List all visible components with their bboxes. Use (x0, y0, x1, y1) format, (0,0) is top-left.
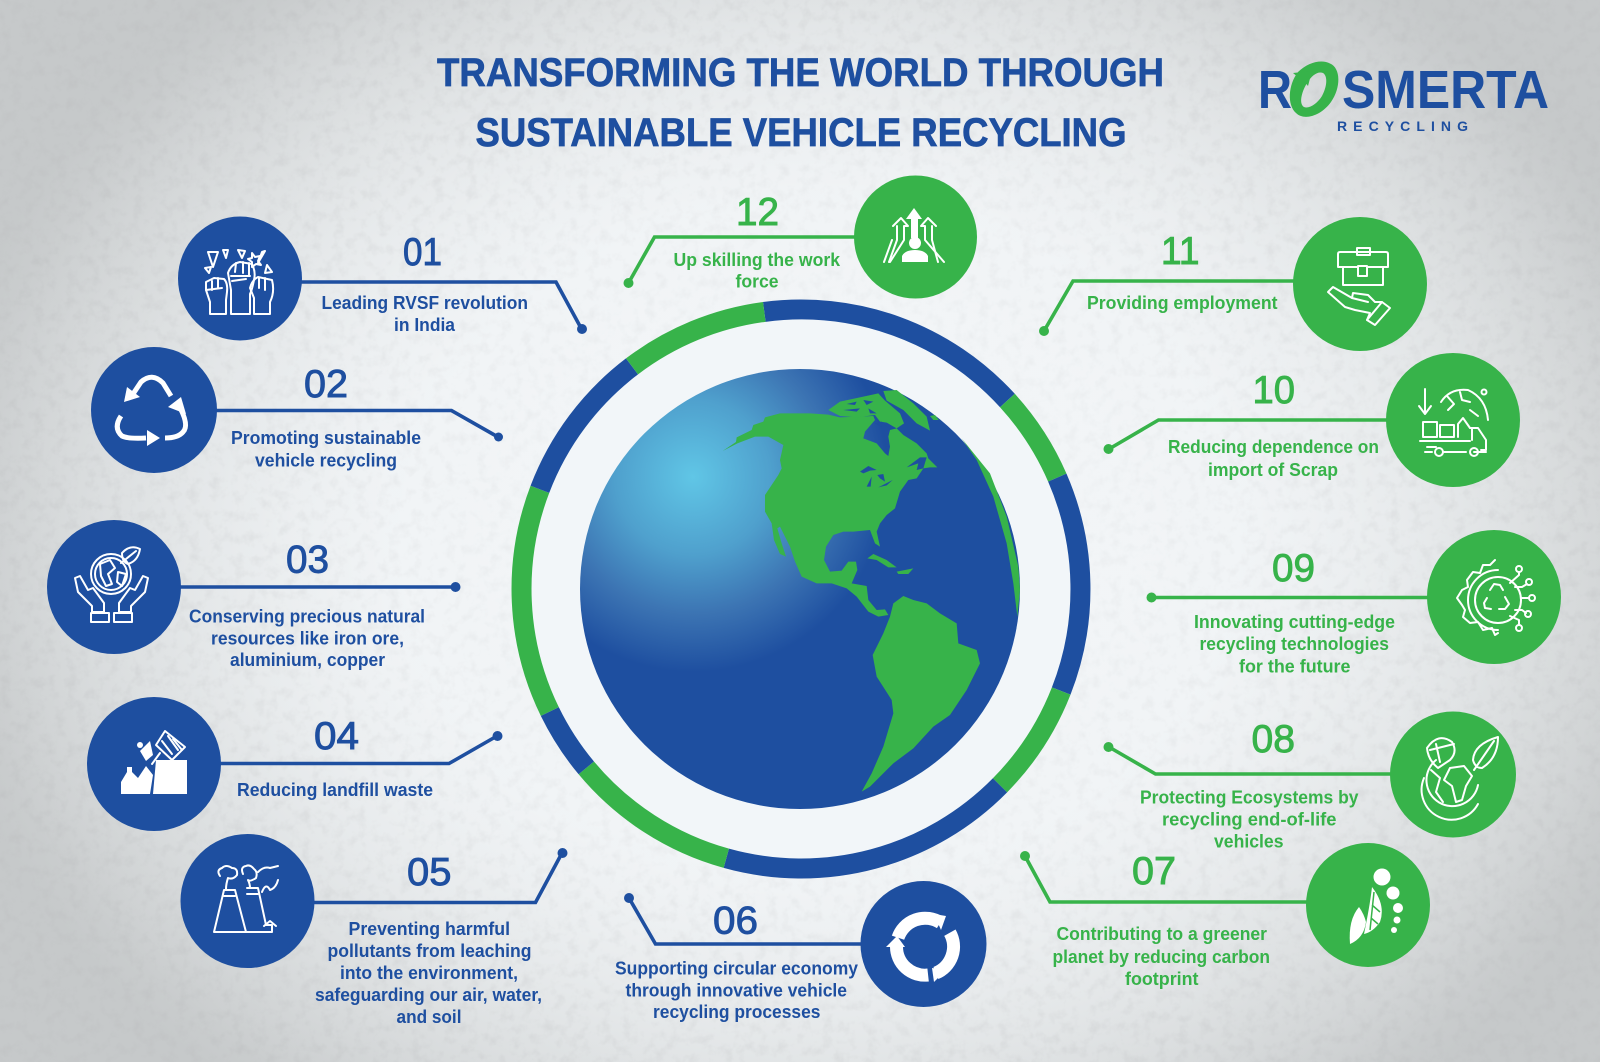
halo inside ring (513, 301, 1089, 877)
icon circle: leaf footprint (1306, 843, 1430, 967)
description 05: Preventing harmful (348, 919, 510, 939)
number 03: 03 (286, 538, 329, 582)
description 03 (189, 606, 425, 670)
connector 10 (1104, 420, 1390, 454)
icon circle: circular economy arrows (860, 881, 986, 1007)
description 02 (231, 428, 421, 470)
connector 02 (215, 410, 503, 442)
logo: Rosmerta Recycling: SMERTA (1342, 60, 1549, 120)
title (437, 51, 1164, 155)
number 07: 07 (1132, 850, 1176, 893)
item 09 (1146, 530, 1561, 676)
icon circle: import truck and globe (1386, 353, 1520, 487)
description 01 (322, 293, 528, 335)
item 05 (180, 834, 568, 1027)
connector 07 (1020, 851, 1310, 902)
number 02: 02 (304, 363, 348, 406)
globe ocean (580, 369, 1020, 809)
icon circle: upskilling arrows and person (854, 176, 977, 298)
description 08: vehicles (1214, 832, 1284, 852)
description 06: recycling processes (653, 1002, 820, 1022)
item 02 (91, 347, 503, 473)
number 10: 10 (1252, 369, 1295, 412)
description 07: footprint (1125, 969, 1199, 989)
description 08: recycling end-of-life (1162, 810, 1336, 830)
description 12: force (736, 272, 778, 292)
icon circle: hands holding globe (47, 520, 181, 654)
icon circle: raised fists (178, 216, 302, 340)
item 07 (1020, 843, 1430, 989)
description 05: safeguarding our air, water, (315, 985, 542, 1005)
item 11 (1039, 217, 1427, 351)
description 06 (615, 958, 858, 1022)
icon circle: recycle arrows (91, 347, 217, 473)
description 09 (1194, 612, 1395, 676)
description 05: into the environment, (340, 963, 518, 983)
number 06: 06 (713, 900, 758, 942)
description 06: through innovative vehicle (626, 980, 847, 1000)
continents (723, 390, 1020, 792)
connector 12 (624, 237, 860, 288)
icon circle: gear with circuit and recycle (1427, 530, 1561, 664)
description 02: Promoting sustainable (231, 428, 421, 448)
item 06 (615, 881, 986, 1022)
description 03: Conserving precious natural (189, 606, 425, 626)
description 03: resources like iron ore, (211, 628, 404, 648)
description 06: Supporting circular economy (615, 958, 858, 978)
number 08: 08 (1252, 718, 1295, 761)
number 11: 11 (1161, 230, 1200, 273)
connector 09 (1146, 592, 1430, 602)
description 05 (315, 919, 542, 1027)
number 04: 04 (314, 715, 359, 758)
description 01: in India (394, 315, 456, 335)
number 09: 09 (1272, 547, 1315, 590)
description 12 (674, 250, 841, 292)
connector 06 (624, 893, 862, 944)
description 10: import of Scrap (1208, 460, 1338, 480)
connector 03 (178, 582, 460, 592)
logo: Rosmerta Recycling: R (1258, 60, 1292, 120)
number 05: 05 (407, 851, 452, 894)
description 09: Innovating cutting-edge (1194, 612, 1395, 632)
description 07: Contributing to a greener (1056, 924, 1267, 944)
icon circle: briefcase and hand (1293, 217, 1427, 351)
description 05: pollutants from leaching (328, 941, 532, 961)
description 09: for the future (1239, 656, 1350, 676)
description 01: Leading RVSF revolution (322, 293, 528, 313)
title: SUSTAINABLE VEHICLE RECYCLING (476, 111, 1126, 155)
description 10 (1168, 437, 1379, 480)
connector 11 (1039, 281, 1296, 336)
logo: Rosmerta Recycling (1258, 60, 1549, 134)
description 11: Providing employment (1087, 293, 1278, 313)
South America and Africa edge (862, 438, 1020, 792)
title: TRANSFORMING THE WORLD THROUGH (437, 51, 1164, 95)
connector 01 (300, 282, 587, 334)
connector 05 (313, 848, 568, 902)
description 07 (1052, 924, 1270, 989)
description 10: Reducing dependence on (1168, 437, 1379, 457)
connector 08 (1104, 742, 1394, 774)
number 12: 12 (736, 191, 779, 234)
description 05: and soil (396, 1007, 462, 1027)
item 03 (47, 520, 460, 670)
description 08: Protecting Ecosystems by (1140, 788, 1358, 808)
description 08 (1140, 788, 1358, 852)
North America and the Caribbean (723, 390, 939, 617)
description 03: aluminium, copper (230, 650, 385, 670)
item 12 (624, 176, 977, 298)
item 04 (87, 697, 502, 831)
icon circle: earth with leaves (1390, 712, 1516, 838)
description 04: Reducing landfill waste (237, 780, 433, 800)
description 09: recycling technologies (1200, 634, 1389, 654)
description 02: vehicle recycling (255, 450, 397, 470)
icon circle: factory cooling towers (180, 834, 314, 968)
item 10 (1104, 353, 1520, 487)
segmented ring (522, 309, 1080, 868)
item 08 (1104, 712, 1516, 852)
icon circle: landfill waste (87, 697, 221, 831)
central globe with ring (513, 301, 1089, 877)
number 01: 01 (403, 231, 442, 274)
item 01 (178, 216, 587, 340)
description 07: planet by reducing carbon (1052, 947, 1270, 967)
connector 04 (219, 731, 502, 764)
description 12: Up skilling the work (674, 250, 841, 270)
logo: Rosmerta Recycling: RECYCLING (1337, 118, 1468, 134)
